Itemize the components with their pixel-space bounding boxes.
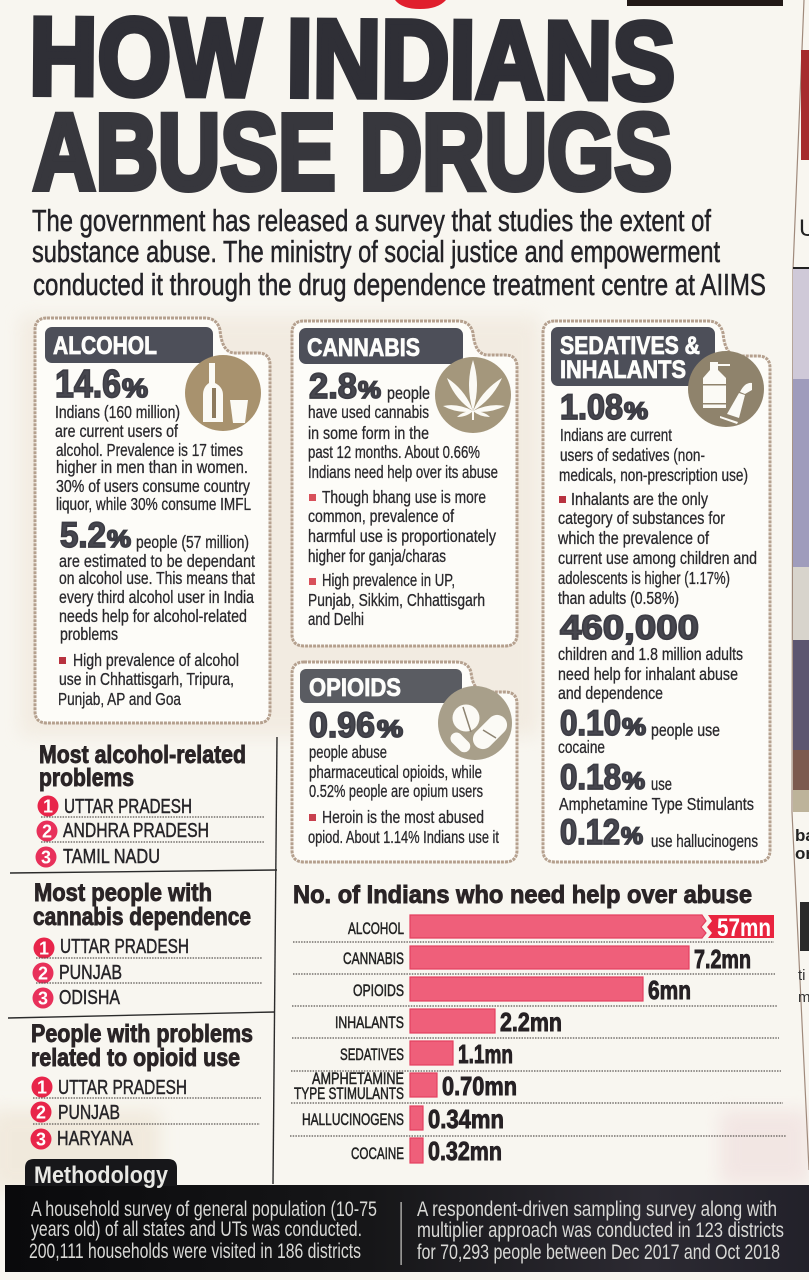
sedatives heading bbox=[551, 327, 715, 386]
rank 2: PUNJAB bbox=[59, 962, 122, 984]
cannabis stat 2.8%: 2.8 bbox=[309, 367, 357, 406]
sedatives stat 1.08%: 1.08 bbox=[560, 388, 623, 427]
alcohol dependence text: every third alcohol user in India bbox=[59, 587, 254, 607]
stat hallucinogens: % bbox=[621, 823, 643, 850]
alcohol text: liquor, while 30% consume IMFL bbox=[56, 494, 251, 514]
inhalants bullet: current use among children and bbox=[558, 548, 757, 568]
bar: opioids: 6mn bbox=[648, 975, 691, 1005]
list heading: Most alcohol-related bbox=[39, 741, 246, 769]
bar: amphetamine type stimulants bbox=[294, 1070, 517, 1103]
opioids bullet: Heroin is the most abused bbox=[322, 807, 484, 827]
cannabis bullet: prevalence: High prevalence in UP, bbox=[322, 570, 455, 590]
alcohol text: are current users of bbox=[55, 421, 178, 441]
list heading: People with problems bbox=[31, 1020, 253, 1048]
inhalants bullet: which the prevalence of bbox=[557, 528, 709, 548]
stat amphetamine: 0.18 bbox=[560, 758, 621, 797]
opioids bullet: opiod. About 1.14% Indians use it bbox=[308, 827, 499, 847]
stat cocaine: cocaine bbox=[558, 737, 605, 757]
rank 1: UTTAR PRADESH bbox=[58, 1077, 187, 1099]
inhalants bullet: Inhalants are the only bbox=[571, 489, 708, 509]
bar: sedatives: SEDATIVES bbox=[340, 1046, 404, 1064]
cannabis bullet: prevalence bbox=[308, 570, 485, 629]
cannabis bullet: bhang: harmful use is proportionately bbox=[308, 526, 496, 546]
list: most alcohol-related problems bbox=[36, 741, 265, 868]
rank 3 bbox=[30, 1128, 134, 1150]
bar: cocaine bbox=[351, 1136, 502, 1166]
bar: opioids: OPIOIDS bbox=[353, 982, 404, 1000]
stat 460,000 bbox=[558, 609, 743, 703]
bar: cannabis: 7.2mn bbox=[694, 944, 751, 974]
adjacent newspaper column: ti bbox=[798, 967, 806, 984]
alcohol dependence text: on alcohol use. This means that bbox=[59, 568, 255, 588]
rank 3 bbox=[32, 987, 121, 1009]
list: people with problems related to opioid use bbox=[30, 1020, 261, 1150]
stat amphetamine: % bbox=[622, 768, 645, 795]
cannabis bullet: bhang bbox=[308, 487, 496, 566]
bar chart: number of Indians who need help bbox=[290, 881, 786, 1166]
icon: bottle and tube bbox=[688, 351, 764, 427]
alcohol heading: ALCOHOL bbox=[53, 332, 157, 360]
rank 3: TAMIL NADU bbox=[63, 846, 160, 868]
alcohol text: 30% of users consume country bbox=[56, 476, 250, 496]
alcohol stat 5.2%: people (57 million) bbox=[136, 532, 249, 552]
sedatives text: users of sedatives (non- bbox=[560, 445, 705, 465]
alcohol stat 14.6%: 14.6 bbox=[55, 363, 121, 406]
list heading: problems bbox=[39, 764, 134, 792]
list heading: cannabis dependence bbox=[33, 903, 251, 931]
bar: hallucinogens: HALLUCINOGENS bbox=[302, 1111, 404, 1129]
methodology left text: 200,111 households were visited in 186 districts bbox=[29, 1240, 361, 1263]
stat hallucinogens bbox=[560, 813, 758, 852]
alcohol stat 5.2%: % bbox=[107, 526, 131, 553]
cannabis stat 2.8% bbox=[309, 367, 430, 406]
inhalants bullet: adolescents is higher (1.17%) bbox=[558, 568, 730, 588]
rank 3: ODISHA bbox=[59, 987, 121, 1009]
cannabis text bbox=[308, 402, 498, 482]
bar: amphetamine type stimulants: 0.70mn bbox=[442, 1071, 517, 1101]
opioids text bbox=[309, 742, 483, 801]
cannabis heading bbox=[299, 328, 463, 364]
alcohol heading bbox=[45, 327, 213, 363]
cannabis text: in some form in the bbox=[308, 423, 429, 443]
stat amphetamine bbox=[559, 758, 754, 814]
cannabis bullet: prevalence: Punjab, Sikkim, Chhattisgarh bbox=[308, 590, 485, 610]
bar: amphetamine type stimulants: TYPE STIMULANTS bbox=[294, 1085, 404, 1103]
bar: sedatives bbox=[340, 1039, 513, 1069]
stat 460,000: children and 1.8 million adults bbox=[558, 644, 743, 664]
stat cocaine: % bbox=[622, 714, 646, 741]
sedatives stat 1.08%: % bbox=[624, 398, 648, 425]
cannabis bullet: bhang: higher for ganja/charas bbox=[308, 546, 446, 566]
list heading: Most people with bbox=[34, 879, 212, 907]
stat 460,000: 460,000 bbox=[560, 609, 699, 647]
list heading bbox=[39, 741, 246, 792]
cannabis stat 2.8%: % bbox=[358, 377, 381, 404]
rank 3: 3 bbox=[36, 1130, 46, 1150]
rank 2 bbox=[30, 1102, 120, 1124]
bar: cocaine: 0.32mn bbox=[428, 1136, 502, 1166]
rank 1: 1 bbox=[39, 938, 49, 958]
inhalants bullet: than adults (0.58%) bbox=[558, 588, 679, 608]
opioids heading: OPIOIDS bbox=[309, 674, 401, 702]
bar: hallucinogens bbox=[302, 1104, 504, 1134]
methodology right text bbox=[417, 1198, 784, 1264]
bar: cannabis: CANNABIS bbox=[343, 950, 404, 968]
inhalants bullet bbox=[557, 489, 757, 608]
cannabis bullet: bhang: Though bhang use is more bbox=[322, 487, 486, 507]
rank 2 bbox=[36, 820, 209, 842]
alcohol dependence text bbox=[59, 551, 255, 644]
alcohol text: alcohol. Prevalence is 17 times bbox=[56, 440, 243, 460]
rank 1: 1 bbox=[37, 1078, 47, 1098]
top page fragments bbox=[395, 0, 783, 9]
bar: inhalants: 2.2mn bbox=[500, 1007, 562, 1037]
title: ABUSE DRUGS bbox=[33, 91, 672, 212]
alcohol dependence text: needs help for alcohol-related bbox=[59, 606, 247, 626]
bar: amphetamine type stimulants: AMPHETAMINE bbox=[312, 1070, 404, 1088]
opioids stat 0.96%: % bbox=[377, 716, 403, 743]
opioids text: people abuse bbox=[309, 742, 387, 762]
opioids heading bbox=[300, 669, 462, 703]
bar: alcohol: 57mn bbox=[717, 914, 771, 942]
panel: cannabis bbox=[292, 321, 517, 646]
inhalants bullet: category of substances for bbox=[558, 508, 725, 528]
alcohol bullet: Punjab, AP and Goa bbox=[58, 689, 181, 709]
sedatives heading: INHALANTS bbox=[560, 356, 686, 384]
icon: bottle and glass bbox=[185, 355, 261, 431]
sedatives text bbox=[559, 425, 748, 485]
cannabis bullet: prevalence: and Delhi bbox=[308, 609, 364, 629]
icon: cannabis leaf bbox=[435, 357, 511, 433]
rank 3: 3 bbox=[38, 988, 48, 1008]
sedatives heading: SEDATIVES & bbox=[560, 332, 700, 360]
rank 2: 2 bbox=[42, 822, 52, 842]
stat hallucinogens: 0.12 bbox=[560, 813, 620, 852]
alcohol text: higher in men than in women. bbox=[56, 457, 248, 477]
cannabis text: past 12 months. About 0.66% bbox=[308, 442, 480, 462]
cannabis bullet: bhang: common, prevalence of bbox=[308, 506, 454, 526]
stat 460,000: need help for inhalant abuse bbox=[558, 664, 738, 684]
alcohol stat 5.2%: 5.2 bbox=[60, 516, 106, 555]
panel: methodology bbox=[5, 1159, 809, 1272]
alcohol dependence text: are estimated to be dependant bbox=[59, 551, 255, 571]
rank 1 bbox=[34, 936, 189, 958]
opioids bullet bbox=[308, 807, 499, 847]
opioids text: pharmaceutical opioids, while bbox=[309, 762, 482, 782]
opioids stat 0.96%: 0.96 bbox=[309, 706, 375, 745]
methodology left text: A household survey of general population (10-75 bbox=[31, 1198, 377, 1221]
stat hallucinogens: use hallucinogens bbox=[651, 831, 758, 851]
panel: opioids bbox=[292, 662, 517, 862]
cannabis heading: CANNABIS bbox=[307, 334, 420, 362]
stat cocaine: people use bbox=[651, 720, 720, 740]
sedatives text: Indians are current bbox=[560, 425, 672, 445]
bar: alcohol bbox=[348, 914, 774, 942]
rank 1 bbox=[32, 1076, 187, 1099]
methodology left text: years old) of all states and UTs was conducted. bbox=[31, 1218, 362, 1241]
bar: cocaine: COCAINE bbox=[351, 1145, 404, 1163]
bar: inhalants bbox=[335, 1007, 562, 1037]
rank 2: 2 bbox=[38, 964, 48, 984]
chart title: No. of Indians who need help over abuse bbox=[293, 881, 752, 909]
panel: alcohol bbox=[35, 318, 270, 723]
icon: pills bbox=[438, 686, 512, 760]
rank 2: 2 bbox=[36, 1102, 46, 1122]
alcohol stat 14.6%: % bbox=[122, 373, 148, 403]
rank 3 bbox=[36, 846, 160, 868]
bar: alcohol: ALCOHOL bbox=[348, 920, 404, 938]
rank 1 bbox=[38, 796, 192, 818]
sedatives text: medicals, non-prescription use) bbox=[559, 465, 748, 485]
stat amphetamine: use bbox=[651, 774, 672, 794]
alcohol bullet: High prevalence of alcohol bbox=[73, 650, 239, 670]
cannabis stat 2.8%: people bbox=[387, 383, 430, 403]
bar: opioids bbox=[353, 975, 691, 1005]
rank 1: UTTAR PRADESH bbox=[64, 796, 192, 818]
cannabis text: Indians need help over its abuse bbox=[308, 462, 498, 482]
alcohol bullet bbox=[58, 650, 239, 709]
rank 2: ANDHRA PRADESH bbox=[63, 820, 209, 842]
rank 3: HARYANA bbox=[57, 1128, 134, 1150]
alcohol text: Indians (160 million) bbox=[55, 402, 180, 422]
bar: inhalants: INHALANTS bbox=[335, 1014, 404, 1032]
title bbox=[29, 0, 676, 212]
adjacent newspaper column bbox=[792, 0, 809, 1170]
stat cocaine bbox=[558, 704, 720, 757]
stat amphetamine: Amphetamine Type Stimulants bbox=[559, 794, 754, 814]
bar: hallucinogens: 0.34mn bbox=[428, 1104, 504, 1134]
intro text bbox=[32, 203, 766, 302]
methodology left text bbox=[29, 1198, 377, 1263]
alcohol stat 5.2% bbox=[60, 516, 249, 555]
rank 1: UTTAR PRADESH bbox=[60, 936, 189, 958]
alcohol dependence text: problems bbox=[60, 624, 118, 644]
rank 2: PUNJAB bbox=[58, 1102, 120, 1124]
list heading bbox=[31, 1020, 253, 1072]
list: most people with cannabis dependence bbox=[32, 879, 262, 1009]
stat 460,000: and dependence bbox=[558, 683, 663, 703]
rank 2 bbox=[32, 962, 122, 984]
section dividers bbox=[8, 737, 277, 1184]
list heading: related to opioid use bbox=[31, 1044, 240, 1072]
opioids text: 0.52% people are opium users bbox=[309, 781, 483, 801]
panel: sedatives and inhalants bbox=[543, 321, 770, 862]
cannabis text: have used cannabis bbox=[308, 402, 429, 422]
stat cocaine: 0.10 bbox=[560, 704, 621, 743]
bar: sedatives: 1.1mn bbox=[458, 1039, 513, 1069]
list heading bbox=[33, 879, 251, 931]
alcohol text bbox=[55, 402, 251, 514]
rank 1: 1 bbox=[43, 796, 53, 816]
alcohol bullet: use in Chhattisgarh, Tripura, bbox=[59, 669, 234, 689]
rank 3: 3 bbox=[41, 848, 51, 868]
methodology tab: Methodology bbox=[34, 1162, 169, 1189]
bar: cannabis bbox=[343, 944, 751, 974]
